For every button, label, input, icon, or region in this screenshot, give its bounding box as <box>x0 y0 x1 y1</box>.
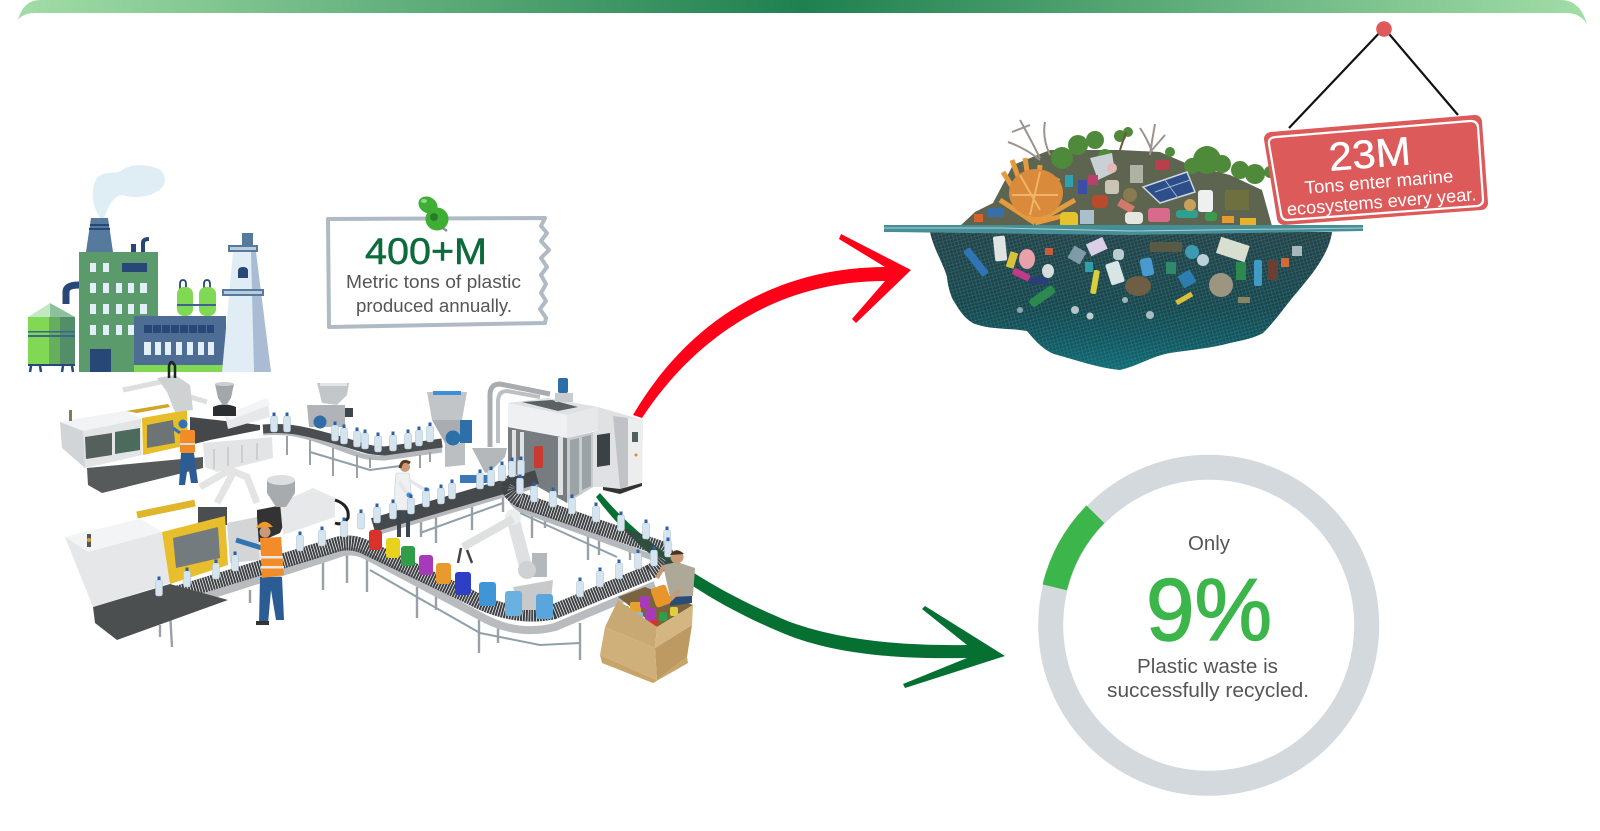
robot arm: packaging <box>458 509 553 610</box>
donut chart: 9% recycled: Only <box>1188 533 1230 555</box>
donut chart: 9% recycled: Plastic waste is <box>1137 656 1278 678</box>
submerged plastic debris <box>963 235 1302 320</box>
worker: lab technician <box>393 461 430 537</box>
debris heap above water <box>960 120 1276 228</box>
hopper: blue granulate feeder <box>427 391 472 467</box>
donut chart: 9% recycled <box>1051 467 1367 783</box>
worker: packer <box>650 550 695 608</box>
callout: 400+M metric tons: produced annually. <box>356 295 512 316</box>
worker: upper operator <box>173 420 198 485</box>
conveyor: main loop <box>142 477 666 660</box>
arrow: red, production to ocean <box>633 234 911 418</box>
worker: lower operator <box>236 522 284 625</box>
illustration: floating ocean plastic island <box>884 120 1363 370</box>
callout: 400+M metric tons <box>328 193 549 327</box>
water surface line <box>884 225 1363 235</box>
callout: 400+M metric tons: 400+M <box>365 231 487 272</box>
callout: 23M hanging sign: 23M <box>1327 129 1412 180</box>
cardboard box on pallet <box>600 587 693 683</box>
donut chart: 9% recycled: successfully recycled. <box>1107 680 1309 702</box>
hopper: grey grinder <box>307 383 353 428</box>
callout: 23M hanging sign: ecosystems every year. <box>1286 184 1477 219</box>
icon: green push pin <box>415 193 448 231</box>
donut chart: 9% recycled: 9% <box>1146 560 1272 659</box>
conveyor: upper <box>263 428 442 478</box>
coloured detergent jugs <box>369 530 553 619</box>
callout: 400+M metric tons: Metric tons of plastic <box>346 271 521 292</box>
illustration: plastic bottling production line <box>60 362 695 683</box>
arrow: green, production to recycling <box>596 493 1005 688</box>
machine: upper injection moulder <box>60 362 273 493</box>
machine: lower injection moulder <box>65 470 348 640</box>
illustration: factory <box>28 165 271 372</box>
bottles on conveyor <box>156 412 672 597</box>
callout: 23M hanging sign <box>1269 21 1483 220</box>
callout: 23M hanging sign: Tons enter marine <box>1304 166 1454 198</box>
top gradient bar <box>18 0 1587 24</box>
machine: filling station <box>460 378 643 503</box>
underwater net mass <box>930 232 1332 370</box>
